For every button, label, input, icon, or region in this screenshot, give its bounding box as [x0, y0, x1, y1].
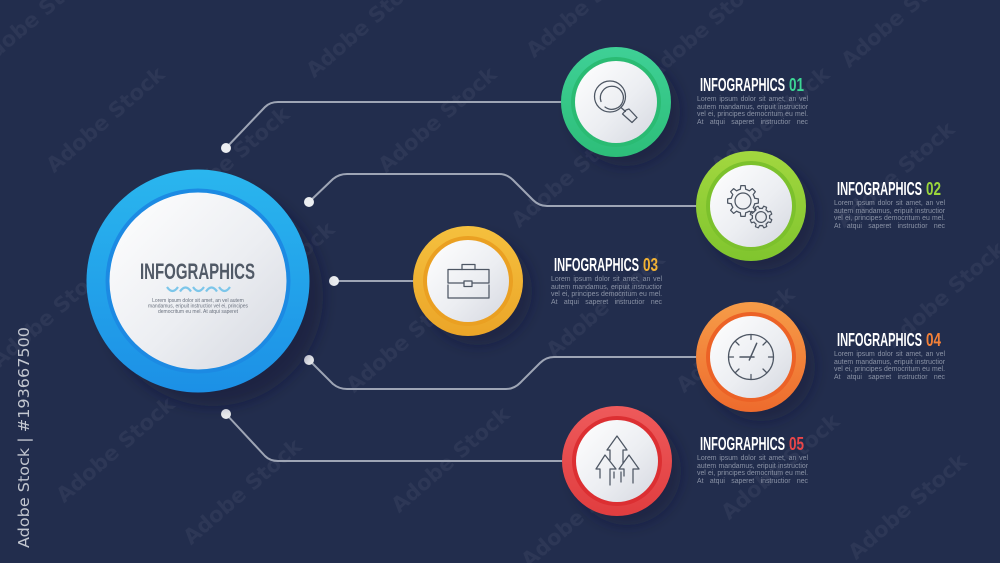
watermark pattern: Adobe Stock [179, 433, 307, 549]
description 05: vel ei, principes democritum eu mel. [697, 470, 808, 477]
description 02: At atqui saperet instructior nec [834, 223, 945, 230]
description 03: vel ei, principes democritum eu mel. [551, 291, 662, 298]
description 03: Lorem ipsum dolor sit amet, an vel [551, 276, 662, 283]
description 05: Lorem ipsum dolor sit amet, an vel [697, 455, 808, 462]
watermark pattern: Adobe Stock [342, 281, 470, 397]
description 04: vel ei, principes democritum eu mel. [834, 366, 945, 373]
watermark pattern: Adobe Stock [844, 448, 972, 563]
watermark pattern: Adobe Stock [52, 391, 180, 507]
description 01: Lorem ipsum dolor sit amet, an vel [697, 96, 808, 103]
description 04: Lorem ipsum dolor sit amet, an vel [834, 351, 945, 358]
description 02: vel ei, principes democritum eu mel. [834, 215, 945, 222]
description 02: Lorem ipsum dolor sit amet, an vel [834, 200, 945, 207]
text block 05 [697, 434, 808, 485]
heading 03: 03 [643, 255, 658, 275]
heading 05: 05 [789, 434, 804, 454]
heading 04: INFOGRAPHICS [837, 330, 922, 350]
description 04 [834, 350, 945, 381]
text block 01 [697, 75, 808, 126]
wave ornament [167, 287, 230, 292]
description 03 [551, 276, 662, 306]
text block 04 [834, 330, 945, 381]
heading 02: 02 [926, 179, 941, 199]
description 03: autem mandamus, eripuit instructior [551, 284, 662, 291]
watermark pattern: Adobe Stock [542, 246, 670, 362]
heading 02: INFOGRAPHICS [837, 179, 922, 199]
description 05: At atqui saperet instructior nec [697, 478, 808, 485]
description 04: autem mandamus, eripuit instructior [834, 359, 945, 366]
text block 03 [551, 255, 662, 306]
description 01: vel ei, principes democritum eu mel. [697, 111, 808, 118]
watermark pattern: Adobe Stock [717, 408, 845, 524]
main description: mandamus, eripuit instructior vel ei, principes [148, 304, 249, 310]
watermark pattern: Adobe Stock [42, 61, 170, 177]
heading 03: INFOGRAPHICS [554, 255, 639, 275]
watermark pattern: Adobe Stock [167, 101, 295, 217]
watermark pattern: Adobe Stock [387, 401, 515, 517]
main description: democritum eu mel. At atqui saperet [158, 309, 239, 315]
heading 04: 04 [926, 330, 941, 350]
main description: Lorem ipsum dolor sit amet, an vel autem [152, 298, 244, 304]
watermark pattern: Adobe Stock [707, 61, 835, 177]
description 01: autem mandamus, eripuit instructior [697, 104, 808, 111]
heading 01: INFOGRAPHICS [700, 75, 785, 95]
main description [148, 298, 249, 315]
watermark pattern: Adobe Stock [212, 216, 340, 332]
description 04: At atqui saperet instructior nec [834, 374, 945, 381]
watermark pattern: Adobe Stock [374, 61, 502, 177]
description 02: autem mandamus, eripuit instructior [834, 208, 945, 215]
watermark pattern: Adobe Stock [832, 116, 960, 232]
text block 02 [834, 179, 945, 230]
description 03: At atqui saperet instructior nec [551, 299, 662, 306]
heading 01: 01 [789, 75, 804, 95]
main heading: INFOGRAPHICS [140, 259, 255, 284]
description 05 [697, 454, 808, 485]
watermark pattern: Adobe Stock [507, 116, 635, 232]
description 02 [834, 200, 945, 230]
description 01 [697, 96, 808, 126]
heading 05: INFOGRAPHICS [700, 434, 785, 454]
description 01: At atqui saperet instructior nec [697, 119, 808, 126]
stock id vertical text: Adobe Stock | #193667500 [15, 327, 33, 548]
description 05: autem mandamus, eripuit instructior [697, 463, 808, 470]
watermark pattern: Adobe Stock [672, 281, 800, 397]
